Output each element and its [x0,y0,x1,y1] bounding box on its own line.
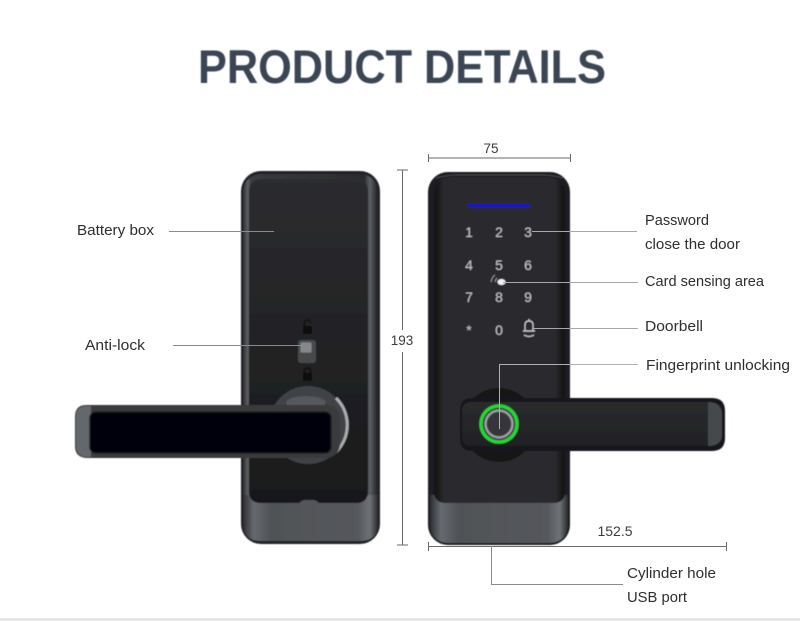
icon: doorbell [523,319,535,336]
lever handle [460,398,725,451]
keypad: 8 [495,289,503,305]
keypad: 4 [465,257,473,273]
keypad: 1 [465,224,473,240]
indicator light [468,204,530,208]
callout: battery box: Battery box [77,223,155,239]
lock: front view [428,172,725,545]
callout: cylinder hole and USB port: USB port [627,590,687,606]
dimension: 152.5 length: 152.5 [597,523,633,539]
dimension: 152.5 length [428,523,726,551]
battery cover panel [249,179,368,503]
callout: cylinder hole and USB port: Cylinder hole [627,566,716,582]
front body shell [428,172,570,545]
callout: card sensing area: Card sensing area [645,274,765,290]
keypad: 6 [524,257,532,273]
keypad: 3 [524,224,532,240]
keypad: 9 [524,289,532,305]
keypad: * [466,322,472,338]
icon: unlocked padlock [303,320,312,334]
title: PRODUCT DETAILS [198,40,606,93]
keypad [465,224,532,338]
lock: back view [75,171,380,544]
anti-lock slider [298,340,316,363]
front panel [434,177,565,503]
callout: fingerprint unlocking: Fingerprint unlocking [646,358,790,374]
keypad: 5 [495,257,503,273]
knob behind handle [462,388,536,462]
dimension: 75 width: 75 [483,141,499,156]
bottom plate [430,495,568,543]
back body shell [241,171,380,544]
lever handle [75,405,340,458]
callout: password close the door: close the door [645,237,740,253]
dimension: 193 height [391,170,413,545]
keypad: 7 [465,289,473,305]
icon: locked padlock [303,368,312,381]
fingerprint reader [481,406,517,442]
keypad: 2 [495,224,503,240]
callout: fingerprint unlocking [500,358,790,429]
icon: card sensing [491,275,506,285]
callout: password close the door [532,213,740,253]
dimension: 193 height: 193 [391,333,413,348]
callout: doorbell: Doorbell [645,319,703,335]
page bottom edge band [0,618,800,621]
callout: anti-lock: Anti-lock [85,338,146,354]
knob rosette [269,386,347,464]
callout: cylinder hole and USB port [492,546,716,606]
keypad: 0 [495,322,503,338]
callout: password close the door: Password [645,213,709,229]
bottom plate [243,495,378,541]
dimension: 75 width [428,141,570,162]
